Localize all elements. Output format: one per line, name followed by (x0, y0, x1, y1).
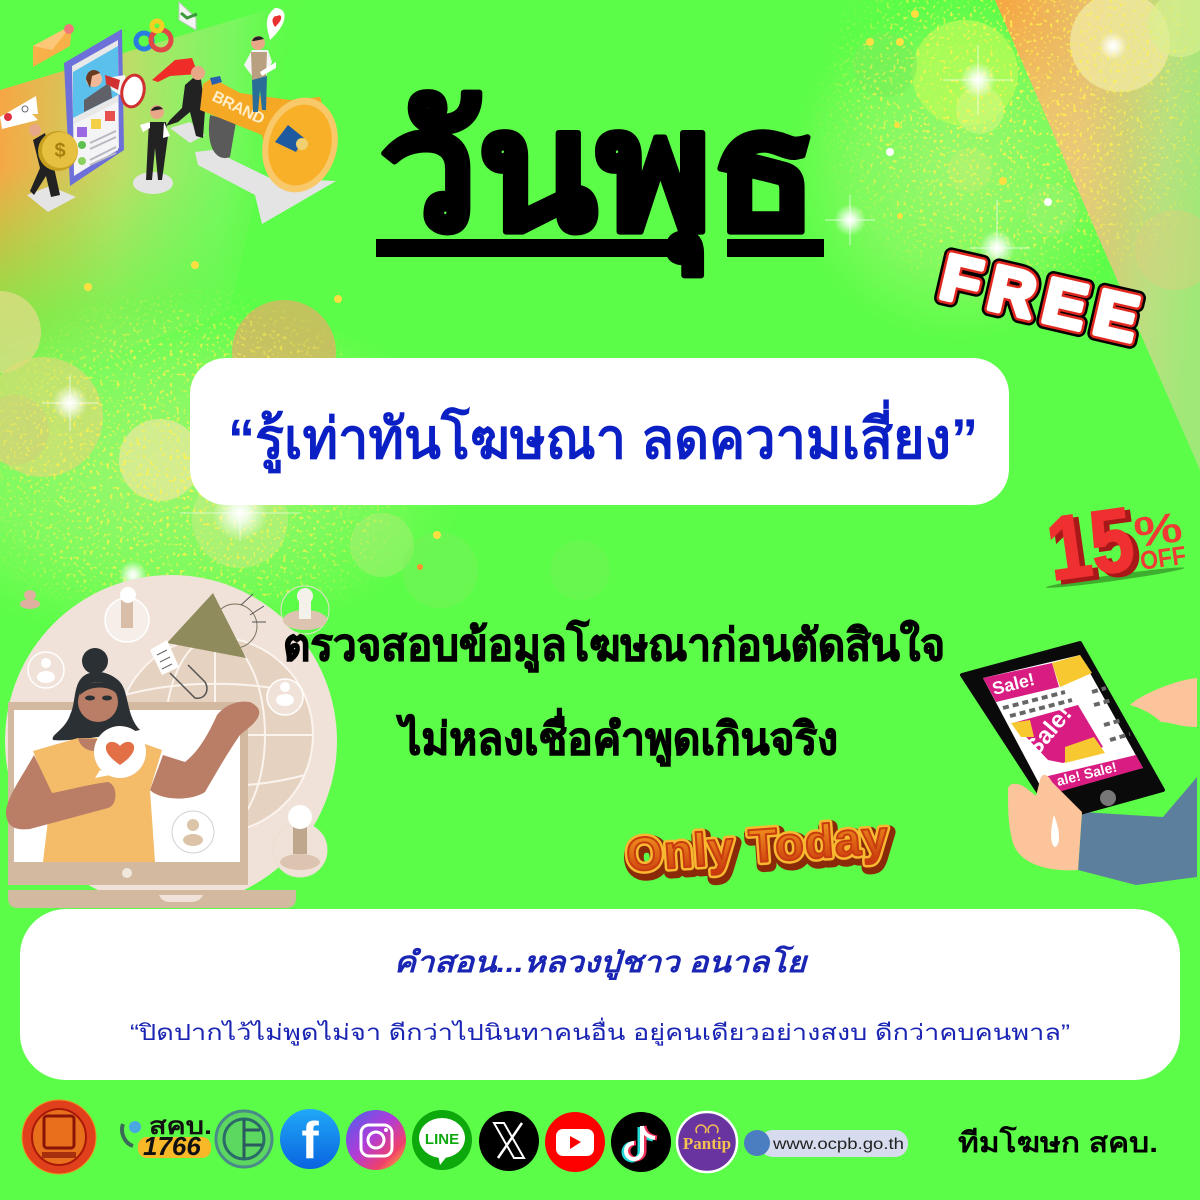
sticker: FREE: FREE (934, 240, 1145, 356)
globe (117, 637, 313, 833)
teaching title: คำสอน...หลวงปู่ชาว อนาลโย (394, 945, 809, 981)
icon: YouTube (545, 1112, 605, 1172)
megaphone BRAND: BRAND (209, 88, 267, 128)
floor platforms (27, 122, 336, 224)
megaphone BRAND (200, 76, 348, 201)
logo: circular emblem (216, 1111, 272, 1167)
sticker: Only Today: Only Today (624, 810, 889, 881)
hotline 1766: สคบ. (149, 1113, 212, 1140)
tablet: Sale! (990, 669, 1037, 699)
logo: OCPB seal (22, 1100, 96, 1174)
sticker: 15% OFF: OFF (1138, 540, 1188, 576)
team credit: ทีมโฆษก สคบ. (958, 1125, 1158, 1158)
running hero with red cape (152, 58, 205, 138)
glitter (0, 0, 1200, 600)
sticker: 15% OFF (1034, 482, 1190, 605)
icon: X (479, 1111, 539, 1171)
icon: LINE: LINE (425, 1131, 459, 1148)
tablet (962, 643, 1163, 818)
holding hand (1008, 775, 1082, 870)
sub-heading text: ไม่หลงเชื่อคำพูดเกินจริง (396, 708, 838, 766)
sub-heading text: ตรวจสอบข้อมูลโฆษณาก่อนตัดสินใจ (283, 618, 945, 672)
icon: Pantip (677, 1112, 737, 1172)
headline pill (190, 358, 1009, 505)
illustration: woman with laptop and megaphone (5, 575, 337, 908)
footer logos (22, 1100, 908, 1174)
chat bubble with heart (0, 96, 38, 129)
sticker: 15% OFF: 15 (1041, 489, 1140, 600)
user bubbles (20, 586, 329, 877)
pointing finger (1130, 678, 1197, 727)
sticker: 15% OFF: 15 (1046, 493, 1146, 604)
man in waistcoat (140, 105, 170, 180)
icon: TikTok (611, 1112, 671, 1172)
hotline 1766: 1766 (143, 1131, 201, 1161)
sparkles (42, 10, 1127, 589)
sleeve (1078, 777, 1197, 885)
man with tablet on megaphone (244, 8, 285, 112)
sticker: Only Today: Only Today (624, 810, 889, 881)
icon: Facebook (280, 1109, 340, 1170)
laptop (8, 702, 296, 908)
backdrop circle (5, 575, 337, 907)
icon: Facebook: f (301, 1112, 319, 1170)
sticker: FREE: FREE (934, 240, 1145, 356)
teaching panel (20, 909, 1180, 1080)
website link: www.ocpb.go.th (772, 1136, 904, 1153)
sticker: 15% OFF: % (1131, 503, 1185, 556)
checkmark card (179, 2, 197, 30)
smartphone (64, 29, 147, 186)
sub-heading text (283, 618, 945, 766)
website link (744, 1130, 908, 1157)
icon: Pantip: Pantip (683, 1134, 731, 1153)
hotline 1766 (122, 1113, 212, 1161)
man carrying coin: $ (54, 140, 66, 162)
tablet: Sale! (1020, 701, 1077, 762)
tablet: ale! Sale! (1055, 759, 1118, 789)
envelope (33, 24, 74, 67)
bokeh lights (0, 0, 1200, 608)
sticker: Only Today: Only Today (627, 814, 892, 885)
megaphone (150, 593, 266, 698)
heart speech bubble (94, 726, 146, 778)
icon: LINE (412, 1110, 472, 1170)
illustration: brand marketing with megaphone (0, 2, 348, 224)
woman (6, 648, 259, 862)
man carrying coin (29, 124, 78, 197)
background (0, 0, 1200, 612)
gears (136, 21, 171, 50)
title: วันพุธ: วันพุธ (380, 77, 818, 276)
illustration: hand holding tablet with sale ad (962, 643, 1197, 885)
icon: Instagram (346, 1110, 406, 1170)
sweat drop (1051, 815, 1059, 847)
teaching quote: “ปิดปากไว้ไม่พูดไม่จา ดีกว่าไปนินทาคนอื่น อยู่คนเดียวอย่างสงบ ดีกว่าคบคนพาล” (130, 1017, 1070, 1046)
headline pill: “รู้เท่าทันโฆษณา ลดความเสี่ยง” (228, 399, 978, 474)
sticker: FREE: FREE (934, 240, 1145, 356)
